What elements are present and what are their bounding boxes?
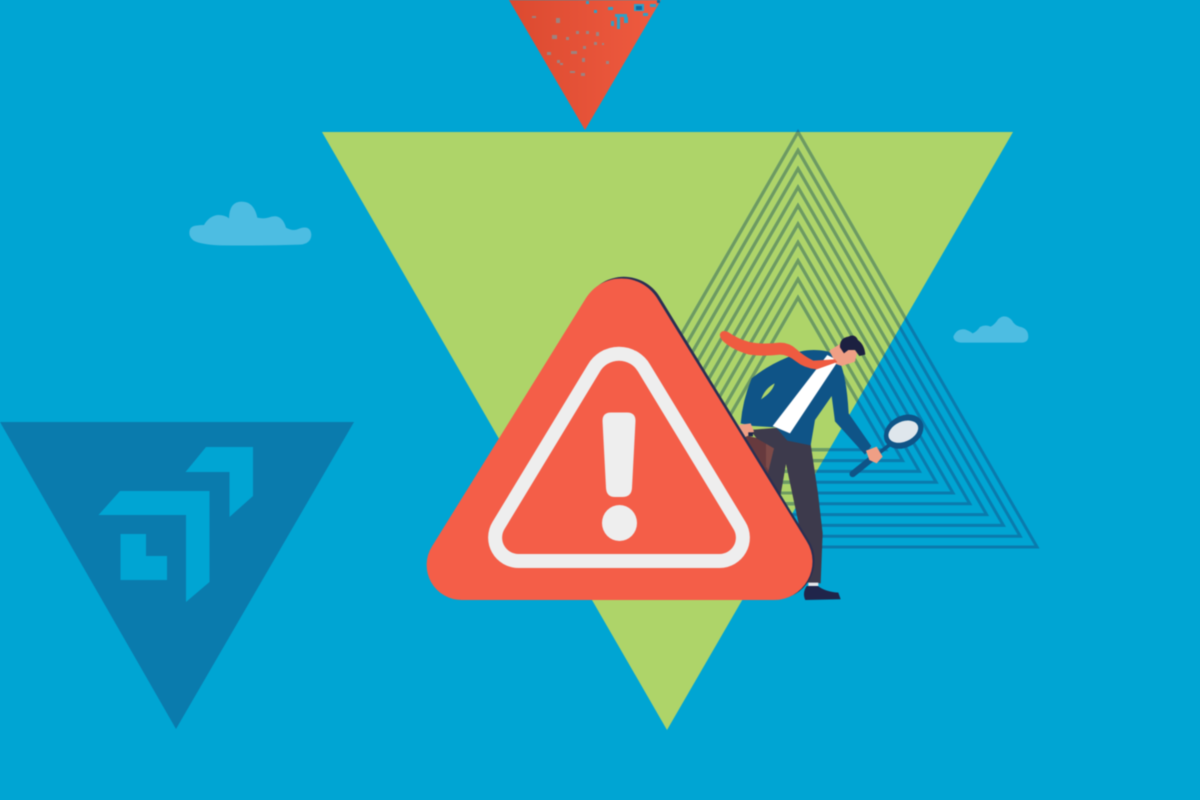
sign shadow edge xyxy=(588,277,815,599)
tie xyxy=(720,331,837,369)
magnifier xyxy=(853,408,930,474)
arm gap xyxy=(761,383,775,399)
logo arrows xyxy=(98,447,253,602)
bag xyxy=(743,435,775,477)
exclamation dot xyxy=(602,505,637,541)
illustration canvas xyxy=(0,0,1040,730)
hair xyxy=(840,336,865,356)
large green triangle xyxy=(322,132,1013,730)
shoe xyxy=(804,586,841,600)
trousers xyxy=(750,427,823,583)
shirt xyxy=(773,355,838,433)
sign body xyxy=(427,278,812,600)
jacket xyxy=(741,350,871,455)
inner outline xyxy=(495,354,743,561)
dark blue triangle with logo xyxy=(0,422,354,729)
cloud right xyxy=(953,316,1028,343)
exclamation bar xyxy=(602,412,636,497)
businessman with magnifier xyxy=(720,331,930,600)
red triangle at top xyxy=(509,0,661,130)
left hand xyxy=(738,423,754,437)
concentric line pyramid xyxy=(680,129,1040,549)
warning sign xyxy=(427,277,815,600)
neck and head xyxy=(829,344,857,366)
cloud left xyxy=(189,202,311,246)
